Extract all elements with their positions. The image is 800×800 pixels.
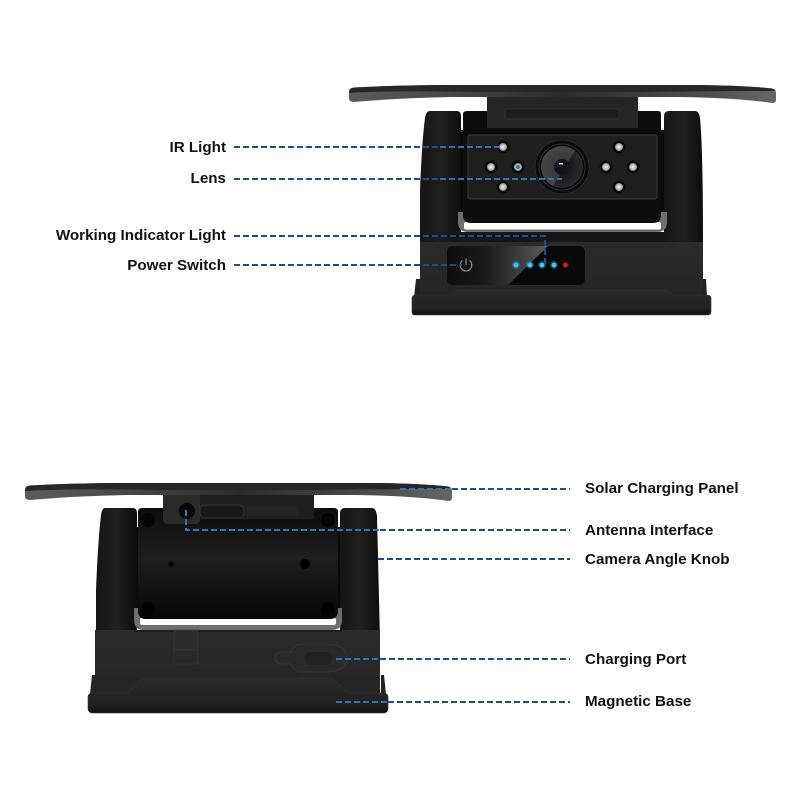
leader: Solar Charging Panel <box>400 488 570 490</box>
label: Solar Charging Panel: Solar Charging Panel <box>585 480 739 497</box>
leader: Magnetic Base <box>336 701 570 703</box>
side tabs of base <box>414 279 707 297</box>
right pivot arm <box>340 508 380 640</box>
magnetic base <box>88 678 388 713</box>
bottom camera device (rear view) <box>25 483 452 713</box>
icon: power switch <box>460 258 472 271</box>
label: Power Switch: Power Switch <box>127 257 226 274</box>
lens <box>535 140 589 194</box>
camera base <box>420 242 703 297</box>
left pivot arm <box>96 508 137 640</box>
label: Charging Port: Charging Port <box>585 651 686 668</box>
label: Camera Angle Knob: Camera Angle Knob <box>585 551 730 568</box>
label: Antenna Interface: Antenna Interface <box>585 522 713 539</box>
IR lights <box>484 140 640 194</box>
indicator lights <box>512 261 569 269</box>
leader: Power Switch <box>234 264 462 266</box>
solar charging panel <box>349 85 776 103</box>
base side tabs <box>90 675 386 694</box>
label: Magnetic Base: Magnetic Base <box>585 693 691 710</box>
leader: Camera Angle Knob <box>378 558 570 560</box>
antenna interface <box>179 503 195 519</box>
left pivot arm <box>420 111 461 245</box>
leader: Working Indicator Light <box>234 236 545 265</box>
solar charging panel <box>25 483 452 501</box>
mounting tab <box>487 97 638 128</box>
label: Working Indicator Light: Working Indicator Light <box>56 227 226 244</box>
leader: Charging Port <box>336 658 570 660</box>
label: IR Light: IR Light <box>169 139 226 156</box>
charging port cover <box>275 644 347 672</box>
magnetic foot <box>412 290 711 315</box>
camera housing <box>463 111 661 223</box>
right pivot arm <box>664 111 703 245</box>
control panel <box>447 246 585 285</box>
lens plate <box>468 135 657 199</box>
rear drum <box>138 508 338 619</box>
camera frame <box>458 212 667 232</box>
leader: IR Light <box>234 146 503 148</box>
hinge frame <box>134 608 342 630</box>
top camera device (front view) <box>349 85 776 315</box>
leader: Antenna Interface <box>186 510 570 530</box>
rear mounting tab <box>163 495 314 524</box>
label: Lens: Lens <box>191 170 226 187</box>
leader: Lens <box>234 178 562 180</box>
rear base <box>95 630 380 695</box>
